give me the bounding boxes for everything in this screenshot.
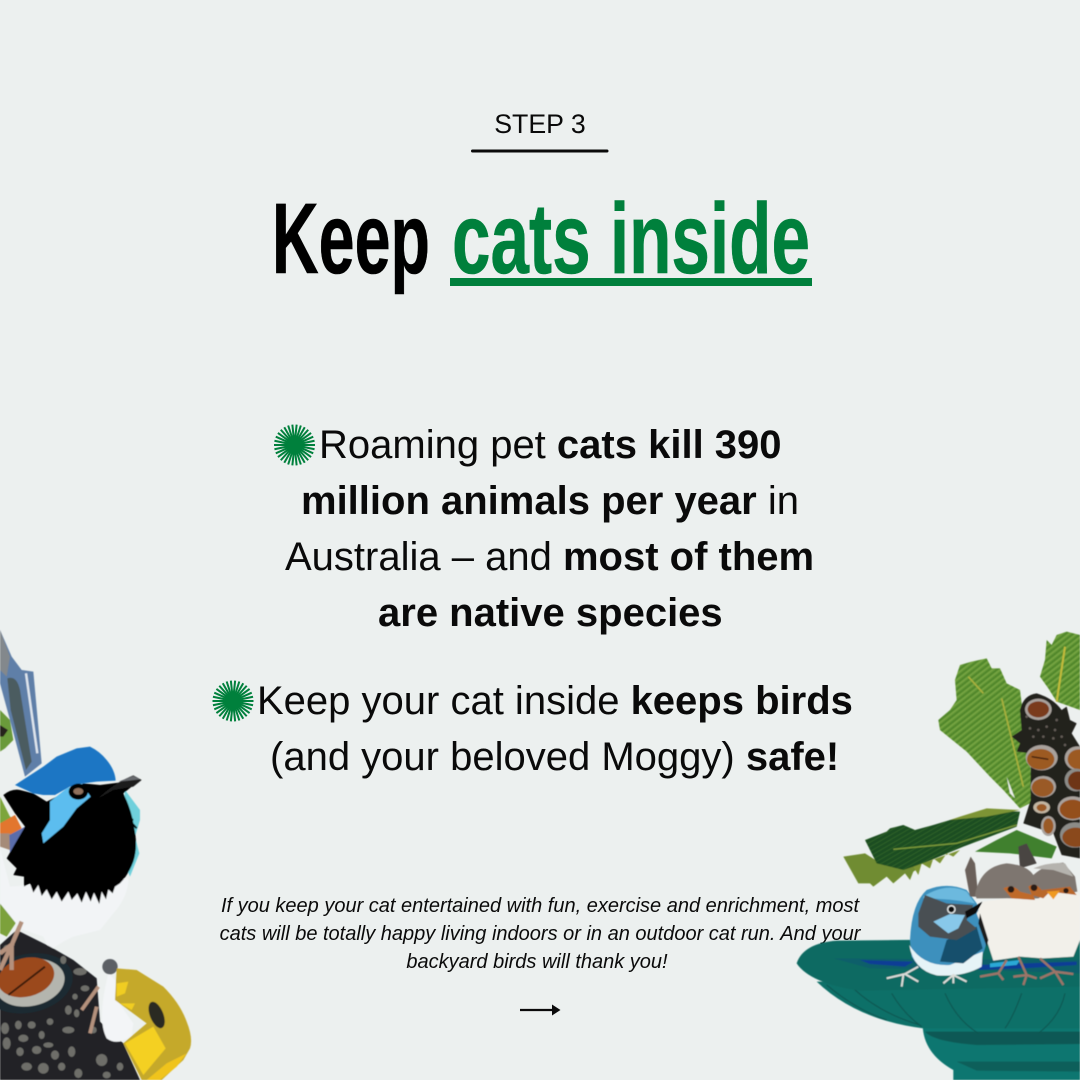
step label [472, 109, 607, 151]
blue wren [887, 886, 987, 987]
icon: arrow [520, 1004, 560, 1016]
text: keep birds safe: Keep your cat inside keeps birds [257, 679, 853, 723]
wren feet [0, 922, 22, 970]
wing colours [0, 815, 22, 847]
white gap [102, 973, 133, 1042]
italic note: cats will be totally happy living indoors or in an outdoor cat run. And your [220, 923, 862, 945]
icon: green starburst [212, 681, 254, 721]
italic note: If you keep your cat entertained with fun, exercise and enrichment, most [221, 895, 860, 917]
text: roaming cats statistic: million animals per year in [301, 479, 799, 523]
banksia leaf: dark [865, 810, 1020, 870]
seed spots [1, 945, 123, 1078]
italic note: backyard birds will thank you! [406, 951, 668, 973]
cone dots [1025, 715, 1066, 746]
title: cats inside [452, 183, 810, 295]
eye [69, 784, 88, 800]
illustration: fairy-wren on banksia, left [0, 630, 191, 1080]
banksia cone [1012, 693, 1080, 858]
bird bath stem [923, 1025, 1080, 1080]
icon: green starburst [274, 425, 315, 465]
bullet: roaming cats [274, 423, 814, 635]
step label: STEP 3 [494, 109, 586, 139]
bird bath rim [797, 938, 1080, 991]
banksia leaf: lower olive [843, 853, 923, 887]
bird bath bowl [817, 982, 1080, 1028]
yellow leaf [115, 968, 191, 1080]
title [272, 183, 812, 295]
light blue cheek [42, 783, 91, 843]
cyan edge [120, 790, 140, 877]
bullet: keep your cat inside [212, 679, 853, 779]
leaf fragments [0, 710, 13, 752]
black head [3, 780, 140, 904]
title: Keep [272, 183, 430, 295]
italic note [220, 895, 862, 973]
banksia leaf: back right [1040, 632, 1080, 710]
beak [98, 775, 142, 798]
banksia leaf: lower green [975, 830, 1057, 858]
text: keep birds safe: (and your beloved Moggy) safe! [270, 735, 839, 779]
banksia cone [0, 930, 140, 1080]
text: roaming cats statistic [285, 423, 814, 635]
follicle [0, 945, 78, 1021]
text: roaming cats statistic: are native species [378, 591, 723, 635]
tail [0, 630, 42, 777]
cone follicles [1025, 699, 1080, 848]
stem [1018, 843, 1037, 868]
throat feathers [120, 810, 137, 828]
text: keep birds safe [257, 679, 853, 779]
illustration: wrens on bird bath with banksia, right [797, 632, 1080, 1080]
white wrens [965, 857, 1080, 985]
text: roaming cats statistic: Roaming pet cats kill 390 [319, 423, 782, 467]
white belly [0, 848, 128, 950]
bowl ribs [827, 985, 1065, 1033]
blue crown [15, 747, 116, 795]
text: roaming cats statistic: Australia – and most of them [285, 535, 814, 579]
banksia leaf: back left [938, 658, 1033, 808]
